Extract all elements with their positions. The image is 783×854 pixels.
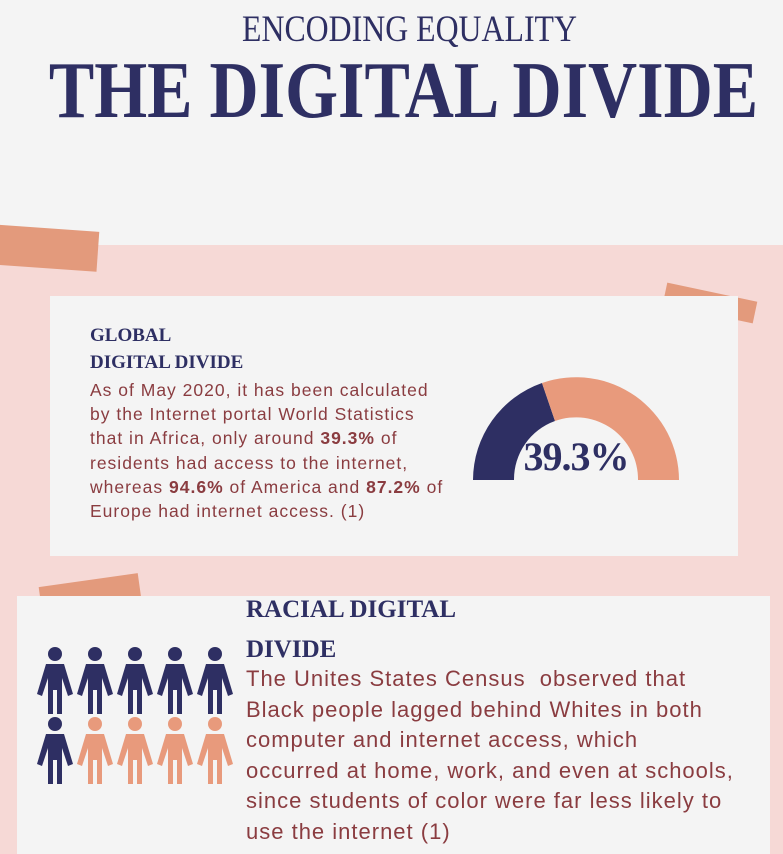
text block: global: residents had access to the internet, [90, 453, 408, 473]
heading: racial [246, 596, 456, 663]
decorative tape right [663, 283, 757, 323]
text block: global: that in Africa, only around 39.3% of [90, 428, 397, 448]
text block: global: Europe had internet access. (1) [90, 501, 365, 521]
text block: global: by the Internet portal World Statistics [90, 404, 415, 424]
panel: global digital divide [50, 296, 738, 556]
text block: global: As of May 2020, it has been calculated [90, 380, 429, 400]
panel: racial digital divide [17, 596, 770, 854]
chart: half donut 39.3%: 39.3% [524, 434, 628, 479]
icon: people chart [37, 647, 233, 784]
heading: global: GLOBAL [90, 325, 171, 346]
text block: racial: computer and internet access, which [246, 727, 638, 752]
heading: global: DIGITAL DIVIDE [90, 352, 243, 373]
decorative tape racial [39, 573, 141, 613]
text block: racial: The Unites States Census observed that [246, 666, 686, 691]
heading: racial: DIVIDE [246, 636, 336, 663]
text block: racial: occurred at home, work, and even at schools, [246, 758, 734, 782]
heading: racial: RACIAL DIGITAL [246, 596, 456, 623]
text block: racial [246, 666, 734, 844]
text block: racial: use the internet (1) [246, 818, 451, 844]
pink band background [0, 245, 783, 854]
text block: global [90, 380, 443, 521]
heading: global [90, 325, 243, 373]
title: main: THE DIGITAL DIVIDE [49, 47, 758, 135]
text block: racial: since students of color were far less likely to [246, 788, 722, 813]
decorative tape left [0, 224, 99, 272]
text block: global: whereas 94.6% of America and 87.2% of [90, 477, 443, 497]
chart: half donut 39.3% [473, 377, 679, 480]
title: subtitle: ENCODING EQUALITY [242, 9, 577, 50]
text block: racial: Black people lagged behind Whites in both [246, 696, 703, 722]
